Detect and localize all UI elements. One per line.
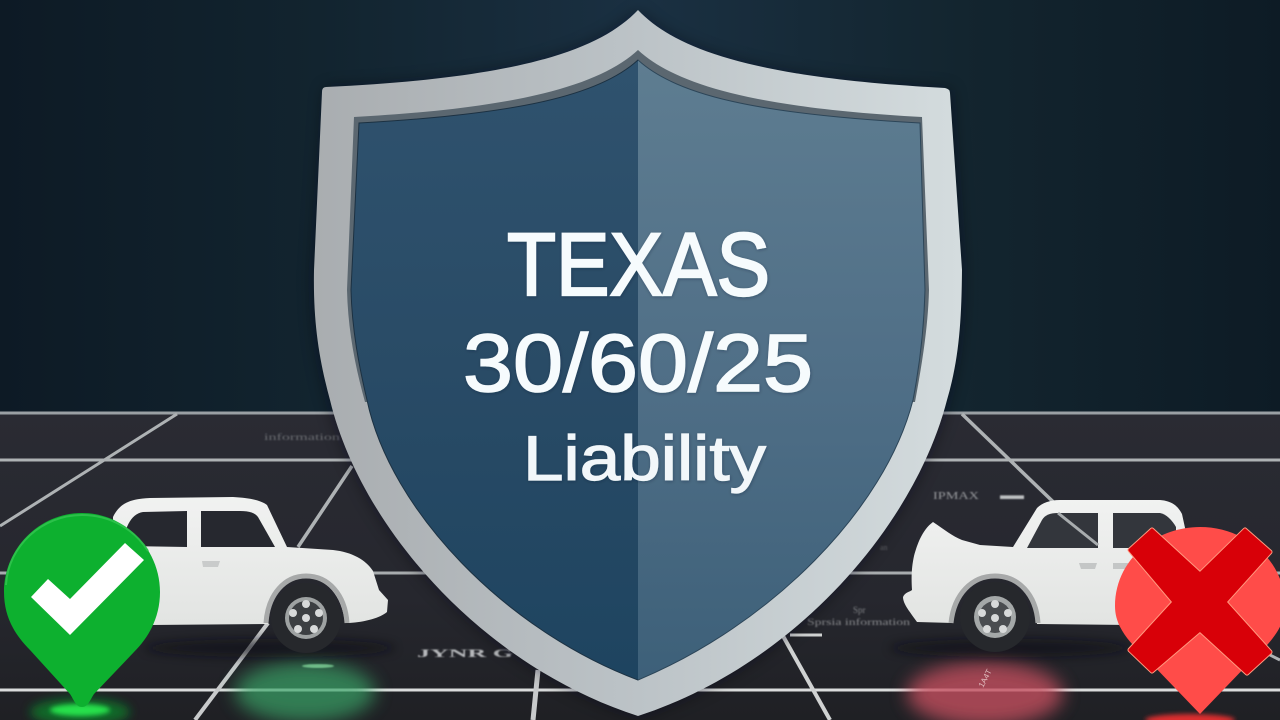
green ground glows — [30, 662, 375, 720]
shield — [314, 10, 962, 716]
floor labels: JYNR G — [417, 646, 513, 660]
title: 30/60/25: 30/60/25 — [463, 318, 813, 409]
red ground glows: 1A4T — [977, 668, 994, 689]
floor labels: information — [264, 432, 341, 442]
floor labels: Sprsia information — [807, 617, 911, 627]
shield outer rim — [314, 10, 962, 716]
title: Liability: Liability — [523, 424, 767, 494]
road grid floor — [0, 412, 1280, 720]
shield blue right half — [638, 60, 926, 680]
floor labels: an — [880, 543, 888, 552]
car: left, undamaged — [113, 497, 395, 657]
shield inner bevel — [347, 50, 929, 402]
title: TEXAS: TEXAS — [507, 214, 770, 314]
dark background — [0, 0, 1280, 412]
icon: green check pin — [4, 513, 160, 707]
icon: red x pin — [1115, 527, 1280, 714]
shield shadow — [314, 12, 962, 716]
car: right, damaged — [890, 500, 1192, 657]
floor labels: Spr — [853, 605, 866, 615]
floor labels: ▬▬ — [1000, 488, 1024, 502]
floor labels — [264, 432, 1024, 660]
shield blue left half — [350, 60, 638, 680]
red ground glows — [907, 662, 1235, 720]
floor labels: IPMAX — [933, 491, 980, 502]
